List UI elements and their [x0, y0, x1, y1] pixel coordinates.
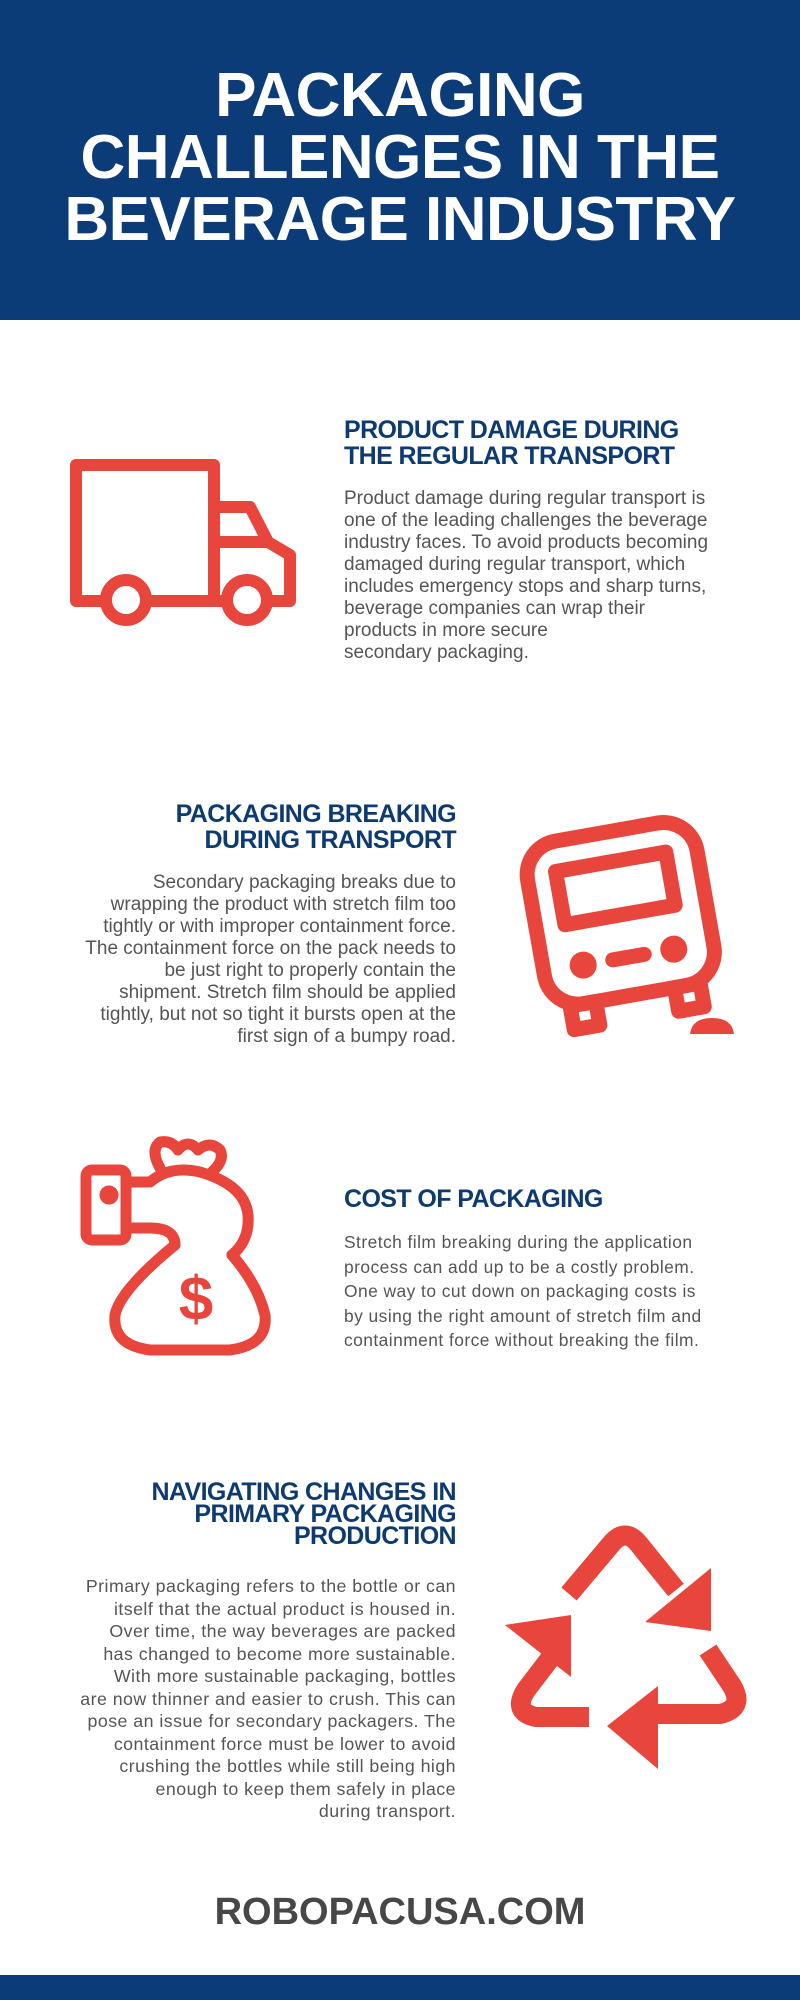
title: PACKAGING	[215, 61, 585, 130]
section 1 text: industry faces. To avoid products becoming	[344, 532, 708, 553]
header banner	[0, 0, 800, 320]
icon: money bag: $	[179, 1265, 213, 1334]
section 2 heading	[176, 800, 456, 854]
section 4 text: containment force must be lower to avoid	[114, 1734, 456, 1754]
section 2 heading: DURING TRANSPORT	[204, 826, 456, 854]
section 3 text: containment force without breaking the film.	[344, 1330, 699, 1350]
title: CHALLENGES IN THE	[80, 123, 720, 192]
section 2 text	[85, 872, 456, 1047]
section 4 heading: PRIMARY PACKAGING	[194, 1500, 456, 1528]
icon: truck	[76, 465, 290, 620]
section 2 text: first sign of a bumpy road.	[237, 1026, 456, 1047]
section 4 text: Over time, the way beverages are packed	[109, 1621, 456, 1641]
bottom bar	[0, 1975, 800, 2000]
section 4 text: are now thinner and easier to crush. This can	[80, 1688, 456, 1708]
section 4 text: With more sustainable packaging, bottles	[114, 1666, 456, 1686]
section 2 text: tightly, but not so tight it bursts open at the	[100, 1004, 456, 1025]
section 4 heading	[151, 1478, 456, 1550]
section 1 text: Product damage during regular transport is	[344, 488, 705, 509]
section 3 text: by using the right amount of stretch film and	[344, 1306, 702, 1326]
section 1 heading	[344, 416, 679, 470]
section 1 text: damaged during regular transport, which	[344, 554, 685, 575]
title: BEVERAGE INDUSTRY	[64, 185, 736, 254]
section 3 heading: COST OF PACKAGING	[344, 1185, 603, 1213]
section 4 text: pose an issue for secondary packagers. The	[88, 1711, 456, 1731]
section 3 text	[344, 1232, 702, 1350]
section 4 text: has changed to become more sustainable.	[103, 1644, 456, 1664]
section 4 heading: NAVIGATING CHANGES IN	[151, 1478, 456, 1506]
icon: recycle	[505, 1536, 736, 1769]
section 1 text: beverage companies can wrap their	[344, 598, 645, 619]
section 4 text: itself that the actual product is housed in.	[114, 1598, 456, 1618]
section 4 text: enough to keep them safely in place	[156, 1778, 456, 1798]
section 2 text: Secondary packaging breaks due to	[153, 872, 456, 893]
section 3 text: Stretch film breaking during the application	[344, 1232, 692, 1252]
section 2 text: tightly or with improper containment force.	[103, 916, 456, 937]
section 3 text: process can add up to be a costly problem.	[344, 1256, 694, 1276]
section 4 text: during transport.	[319, 1801, 456, 1821]
section 1 text: includes emergency stops and sharp turns,	[344, 576, 706, 597]
section 2 text: shipment. Stretch film should be applied	[119, 982, 456, 1003]
footer url: ROBOPACUSA.COM	[215, 1891, 585, 1933]
section 4 text: crushing the bottles while still being high	[119, 1756, 456, 1776]
section 2 text: be just right to properly contain the	[164, 960, 456, 981]
section 4 text: Primary packaging refers to the bottle or can	[86, 1576, 456, 1596]
section 3 text: One way to cut down on packaging costs is	[344, 1281, 696, 1301]
section 2 text: The containment force on the pack needs to	[85, 938, 456, 959]
section 2 text: wrapping the product with stretch film too	[111, 894, 456, 915]
section 2 heading: PACKAGING BREAKING	[176, 800, 456, 828]
section 1 text: secondary packaging.	[344, 642, 529, 663]
section 1 text: products in more secure	[344, 620, 548, 641]
icon: money bag	[86, 1142, 265, 1350]
icon: bus	[522, 817, 734, 1034]
section 4 text	[80, 1576, 456, 1821]
section 1 heading: PRODUCT DAMAGE DURING	[344, 416, 679, 444]
section 1 text: one of the leading challenges the beverage	[344, 510, 707, 531]
section 1 text	[344, 488, 708, 663]
section 1 heading: THE REGULAR TRANSPORT	[344, 442, 674, 470]
title	[64, 61, 736, 254]
section 4 heading: PRODUCTION	[294, 1522, 456, 1550]
